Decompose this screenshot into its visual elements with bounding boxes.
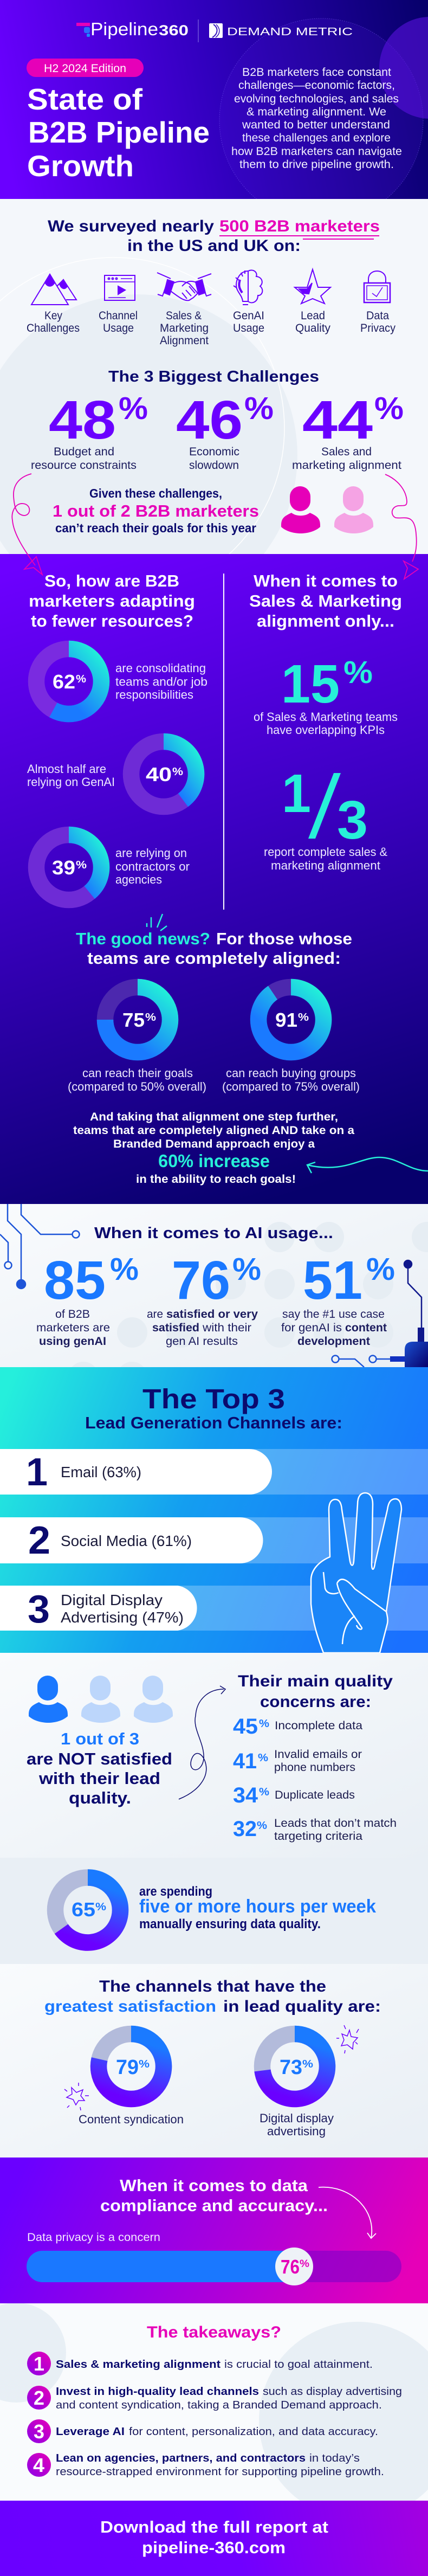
donut: 91% [222, 987, 360, 1093]
donut: 73%: 73 [280, 2056, 302, 2079]
stat: 85%: 85 [44, 1250, 106, 1311]
stat: 51%: development [297, 1335, 370, 1348]
logo: Pipeline360: Pipeline [90, 19, 158, 39]
heading: greatest satisfaction: in lead quality are: [223, 1998, 381, 2015]
stat: 76% [147, 1250, 261, 1348]
logo: Demand Metric: DEMAND METRIC [227, 26, 353, 38]
takeaway 2: and content syndication, taking a Branded Demand approach. [56, 2399, 382, 2411]
stat: 85%: % [110, 1252, 139, 1287]
intro paragraph: challenges—economic factors, [238, 79, 395, 92]
stat: 46%: Economic [189, 446, 239, 458]
heading: greatest satisfaction: The channels that have the [99, 1978, 326, 1995]
donut: 65%: % [95, 1901, 106, 1913]
stat: 15%: of Sales & Marketing teams [254, 710, 398, 724]
stat: one third: 1 [282, 763, 311, 824]
panel: survey and challenges [0, 199, 428, 554]
progress bar: 76% [27, 2247, 401, 2285]
list item: digital display advertising: Digital Display [61, 1592, 163, 1608]
text: 1 out of 3 [27, 1729, 172, 1807]
stat: 85%: of B2B [55, 1308, 90, 1321]
icon: star right [336, 2025, 359, 2053]
heading: fewer resources: to fewer resources? [31, 611, 193, 630]
panel: header [0, 0, 428, 199]
icon: channel video [105, 275, 135, 300]
heading: the top 3: The Top 3 [142, 1383, 285, 1414]
heading: fewer resources [29, 571, 195, 630]
donut: 75%: (compared to 50% overall) [68, 1080, 206, 1093]
takeaway 4: 4 [33, 2454, 44, 2476]
stat: 76%: satisfied [152, 1322, 199, 1334]
heading: the good news [76, 929, 352, 968]
donut: 73%: Digital display [260, 2111, 334, 2125]
takeaway 4 [27, 2452, 384, 2478]
text: five or more hours: manually ensuring data quality. [139, 1917, 321, 1931]
intro paragraph [231, 66, 402, 171]
stat: 51%: 51 [303, 1250, 362, 1311]
stat: one third [264, 763, 387, 872]
text: five or more hours: are spending [139, 1884, 212, 1899]
intro paragraph: these challenges and explore [242, 132, 391, 144]
stat: 44%: % [374, 391, 404, 426]
survey heading [48, 217, 380, 255]
topic labels [27, 310, 395, 347]
heading: the good news: For those whose [216, 929, 352, 948]
panel: footer call to action: Download the full report at [100, 2517, 328, 2536]
donut: 75%: % [145, 1012, 156, 1023]
stat: 48% [31, 390, 148, 472]
title: B2B Pipeline [28, 115, 210, 149]
text: relying on GenAI [27, 762, 115, 789]
stat: 76%: are [147, 1308, 163, 1321]
donut: 73%: advertising [267, 2124, 326, 2138]
heading: sales and marketing alignment: When it comes to [254, 571, 398, 590]
decoration: left swirl arrow [12, 474, 42, 575]
topic labels: Challenges [27, 322, 80, 334]
stat: 85%: marketers are [36, 1322, 110, 1334]
text: relying on contractors: agencies [115, 873, 162, 886]
stat: 76%: % [232, 1252, 261, 1287]
survey heading: in the US and UK on: [127, 237, 301, 255]
panel: footer call to action: pipeline-360.com [142, 2538, 286, 2557]
callout: 1 out of 2: Given these challenges, [89, 486, 222, 500]
stat: 76%: gen AI results [166, 1335, 238, 1348]
stat: 48%: resource constraints [31, 459, 137, 472]
topic labels: Channel [99, 310, 138, 322]
stat: 44%: marketing alignment [292, 459, 401, 472]
heading: compliance [100, 2176, 328, 2215]
text: branded demand [73, 1111, 354, 1186]
stat: 15%: have overlapping KPIs [267, 723, 385, 737]
stat: 48%: 48 [49, 390, 116, 450]
takeaway 4: in today’s [309, 2452, 360, 2464]
concern: invalid emails: 41 [233, 1749, 257, 1773]
takeaway 2: such as display advertising [263, 2386, 402, 2398]
donut: 91%: 91 [275, 1009, 297, 1031]
topic labels: Usage [103, 322, 134, 334]
panel: hours per week [0, 1858, 428, 1964]
donut: 73%: % [302, 2058, 313, 2070]
donut: 79%: % [139, 2058, 150, 2070]
heading: biggest challenges: The 3 Biggest Challenges [108, 368, 319, 385]
heading: quality concerns: Their main quality [238, 1672, 393, 1690]
heading: takeaways: The takeaways? [147, 2323, 281, 2341]
topic labels: Alignment [160, 334, 209, 347]
list item: digital display advertising: 3 [28, 1588, 50, 1631]
text: branded demand: teams that are completely aligned AND take on a [73, 1124, 354, 1137]
takeaway 3: 3 [34, 2420, 44, 2443]
concern: incomplete data [233, 1715, 362, 1738]
concern: duplicate leads: 34 [233, 1783, 258, 1807]
topic labels: GenAI [233, 310, 264, 322]
panel: footer call to action [0, 2501, 428, 2576]
edition pill: H2 2024 Edition [44, 62, 126, 75]
concern: duplicate leads: Duplicate leads [275, 1789, 355, 1801]
arrow: curved [319, 2187, 376, 2238]
text: five or more hours: five or more hours per week [139, 1896, 376, 1917]
topic labels: Data [366, 310, 389, 322]
takeaway 1: Sales & marketing alignment [56, 2359, 221, 2371]
stat: 76%: satisfied or very [166, 1308, 258, 1321]
heading: quality concerns [238, 1672, 393, 1711]
panel: takeaways [0, 2303, 428, 2519]
donut: 65% [55, 1878, 120, 1943]
title: State of [27, 82, 143, 116]
text: consolidating [115, 661, 207, 701]
concern: invalid emails [233, 1748, 362, 1774]
heading: the top 3 [85, 1383, 342, 1432]
stat: 51% [281, 1250, 395, 1348]
panel: data compliance [0, 2158, 428, 2303]
takeaway 2 [27, 2386, 402, 2411]
heading: AI usage: When it comes to AI usage... [94, 1225, 333, 1242]
text: relying on contractors [115, 846, 190, 886]
text: data privacy: Data privacy is a concern [27, 2231, 160, 2244]
text: 1 out of 3: with their lead [38, 1769, 160, 1788]
stat: 15%: % [343, 655, 373, 690]
logo: Demand Metric [209, 23, 353, 38]
stat: 46% [176, 390, 274, 472]
survey heading: We surveyed nearly [48, 217, 214, 235]
topic labels: Lead [301, 310, 325, 322]
list item: social media [0, 1517, 263, 1563]
takeaway 1: 1 [34, 2353, 44, 2375]
text: consolidating: responsibilities [115, 688, 193, 701]
topic labels: Sales & [166, 310, 202, 322]
concern: incomplete data: Incomplete data [275, 1720, 362, 1732]
stat: 46%: 46 [176, 390, 243, 450]
stat: 76%: with their [202, 1322, 251, 1334]
donut: 79% [79, 2034, 184, 2126]
donut: 62%: % [76, 673, 86, 685]
donut: 91%: can reach buying groups [226, 1066, 356, 1080]
icon: three people [29, 1676, 173, 1723]
stat: 51%: say the #1 use case [282, 1308, 385, 1321]
donut: 39%: 39 [52, 856, 75, 879]
intro paragraph: them to drive pipeline growth. [239, 158, 394, 171]
text: branded demand: Branded Demand approach enjoy a [113, 1138, 315, 1150]
stat: 46%: slowdown [189, 459, 239, 472]
donut: 75% [68, 987, 206, 1093]
text: branded demand: And taking that alignment one step further, [90, 1111, 338, 1123]
takeaway 4: resource-strapped environment for supporting pipeline growth. [56, 2466, 384, 2478]
list item: email: 1 [26, 1451, 48, 1494]
concern: incomplete data: % [259, 1718, 269, 1730]
list item: digital display advertising [0, 1586, 197, 1631]
title: Growth [27, 149, 134, 183]
text: consolidating: teams and/or job [115, 675, 207, 688]
list item: email: Email (63%) [61, 1464, 141, 1480]
concern: invalid emails: phone numbers [274, 1761, 355, 1774]
text: relying on contractors: are relying on [115, 846, 187, 860]
stat: 44%: 44 [302, 390, 373, 450]
donut: 65%: 65 [72, 1898, 95, 1921]
text: branded demand: in the ability to reach goals! [136, 1173, 296, 1186]
arrow: squiggle [307, 1157, 428, 1173]
heading: fewer resources: So, how are B2B [44, 571, 179, 590]
list item: email [0, 1449, 272, 1495]
icon: handshake [157, 273, 211, 300]
survey heading: 500 B2B marketers [219, 217, 380, 235]
stat: one third: marketing alignment [271, 859, 380, 872]
stat: 48%: % [119, 391, 148, 426]
intro paragraph: how B2B marketers can navigate [231, 145, 402, 158]
icon: two people [281, 486, 373, 533]
stat: 85%: using genAI [39, 1335, 106, 1348]
title [27, 82, 210, 183]
topic labels: Key [44, 310, 62, 322]
donut: 39%: % [76, 859, 87, 871]
edition pill [27, 59, 144, 77]
icon: sparks [147, 914, 167, 931]
takeaway 2: 2 [34, 2387, 44, 2409]
text: consolidating: are consolidating [115, 661, 206, 675]
concern: targeting: targeting criteria [274, 1830, 362, 1843]
topic labels: Usage [233, 322, 264, 334]
icon: mountains [31, 274, 76, 305]
donut: 91%: % [298, 1012, 309, 1023]
callout: 1 out of 2 [53, 486, 259, 535]
donut: 73% [260, 2034, 334, 2138]
progress bar: 76%: % [300, 2258, 309, 2270]
icon: star [295, 269, 330, 304]
takeaway 4: Lean on agencies, partners, and contractors [56, 2452, 306, 2464]
heading: the top 3: Lead Generation Channels are: [85, 1413, 342, 1432]
stat: 44%: Sales and [321, 446, 372, 458]
heading: compliance: compliance and accuracy... [100, 2196, 328, 2215]
heading: sales and marketing alignment: alignment only... [257, 611, 394, 630]
panel: top 3 lead generation channels [0, 1367, 428, 1653]
concern: invalid emails: Invalid emails or [274, 1748, 362, 1761]
text: relying on GenAI: relying on GenAI [27, 775, 115, 789]
donut: 40%: % [172, 766, 183, 778]
donut: 40%: 40 [146, 763, 172, 785]
concern: targeting: Leads that don’t match [274, 1817, 397, 1830]
icon: padlock [364, 271, 390, 302]
icon: hand showing three [311, 1493, 401, 1653]
donut: 62%: 62 [53, 671, 75, 693]
heading: greatest satisfaction: greatest satisfaction [44, 1998, 216, 2015]
donut: 40% [131, 742, 196, 807]
heading: greatest satisfaction [44, 1978, 381, 2015]
progress bar: 76%: 76 [281, 2256, 300, 2278]
stat: 51%: content [345, 1322, 387, 1334]
callout: 1 out of 2: can’t reach their goals for this year [55, 521, 256, 535]
stat: 46%: % [244, 391, 274, 426]
stat: 15%: 15 [281, 654, 340, 714]
list item: digital display advertising: Advertising (47%) [61, 1609, 184, 1626]
topic labels: Quality [295, 322, 330, 334]
stat: 48%: Budget and [54, 446, 114, 458]
donut: 79%: 79 [116, 2056, 139, 2079]
intro paragraph: wanted to better understand [242, 119, 390, 131]
heading: the good news: teams are completely aligned: [87, 949, 341, 968]
panel: AI usage [0, 1204, 428, 1367]
text: relying on contractors: contractors or [115, 860, 190, 873]
stat: 44% [292, 390, 404, 472]
heading: the good news: The good news? [76, 929, 210, 948]
circuit lines left [0, 1204, 79, 1289]
stat: 51%: for genAI is [281, 1322, 342, 1334]
concern: targeting: % [257, 1820, 267, 1832]
heading: sales and marketing alignment [249, 571, 402, 630]
heading: fewer resources: marketers adapting [29, 591, 195, 610]
donut: 75%: 75 [122, 1009, 145, 1031]
intro paragraph: evolving technologies, and sales [234, 93, 399, 105]
circuit lines right [332, 1260, 428, 1367]
takeaway 1: is crucial to goal attainment. [224, 2359, 373, 2371]
heading: sales and marketing alignment: Sales & Marketing [249, 591, 402, 610]
intro paragraph: & marketing alignment. We [247, 106, 386, 118]
concern: duplicate leads: % [259, 1786, 269, 1798]
stat: one third: report complete sales & [264, 845, 387, 859]
stat: one third: 3 [337, 790, 368, 851]
arrow: loop [179, 1686, 225, 1799]
takeaway 1 [27, 2352, 373, 2375]
donut: 79%: Content syndication [79, 2113, 184, 2126]
heading: quality concerns: concerns are: [260, 1693, 371, 1711]
text: 1 out of 3: quality. [69, 1788, 131, 1807]
stat: 76%: 76 [172, 1250, 230, 1311]
concern: invalid emails: % [258, 1752, 268, 1764]
icon: brain and bulb [234, 270, 262, 305]
intro paragraph: B2B marketers face constant [242, 66, 391, 79]
concern: targeting [233, 1817, 397, 1843]
donut: 75%: can reach their goals [82, 1066, 193, 1080]
donut: 91%: (compared to 75% overall) [222, 1080, 360, 1093]
topic labels: Marketing [160, 322, 209, 334]
stat: 51%: % [366, 1252, 395, 1287]
stat: 15% [254, 654, 398, 737]
takeaway 3: for content, personalization, and data accuracy. [129, 2426, 378, 2438]
bands [163, 1449, 428, 1631]
donut: 62% [36, 649, 101, 714]
logo: Pipeline360: 360 [159, 22, 189, 38]
topic labels: Privacy [360, 322, 395, 334]
list item: social media: 2 [28, 1519, 50, 1562]
icon: star left [64, 2083, 89, 2110]
takeaway 3: Leverage AI [56, 2426, 125, 2438]
logo: Pipeline360 [76, 19, 189, 39]
list item: social media: Social Media (61%) [61, 1532, 192, 1549]
panel: greatest satisfaction [0, 1964, 428, 2158]
takeaway 3 [27, 2419, 378, 2443]
concern: incomplete data: 45 [233, 1715, 258, 1738]
callout: 1 out of 2: 1 out of 2 B2B marketers [53, 501, 259, 520]
stat: 85% [36, 1250, 139, 1348]
heading: compliance: When it comes to data [120, 2176, 308, 2195]
panel: purple alignment section [0, 554, 428, 1204]
text: five or more hours [139, 1884, 376, 1931]
text: 1 out of 3: 1 out of 3 [61, 1729, 139, 1748]
concern: duplicate leads [233, 1783, 355, 1807]
decoration: right swirl arrow [385, 474, 418, 579]
panel: lead quality [0, 1653, 428, 1858]
text: relying on GenAI: Almost half are [27, 762, 106, 776]
text: 1 out of 3: are NOT satisfied [27, 1749, 172, 1768]
donut: 39% [36, 835, 101, 900]
text: branded demand: 60% increase [158, 1151, 270, 1171]
concern: targeting: 32 [233, 1817, 257, 1841]
takeaway 2: Invest in high-quality lead channels [56, 2386, 259, 2398]
